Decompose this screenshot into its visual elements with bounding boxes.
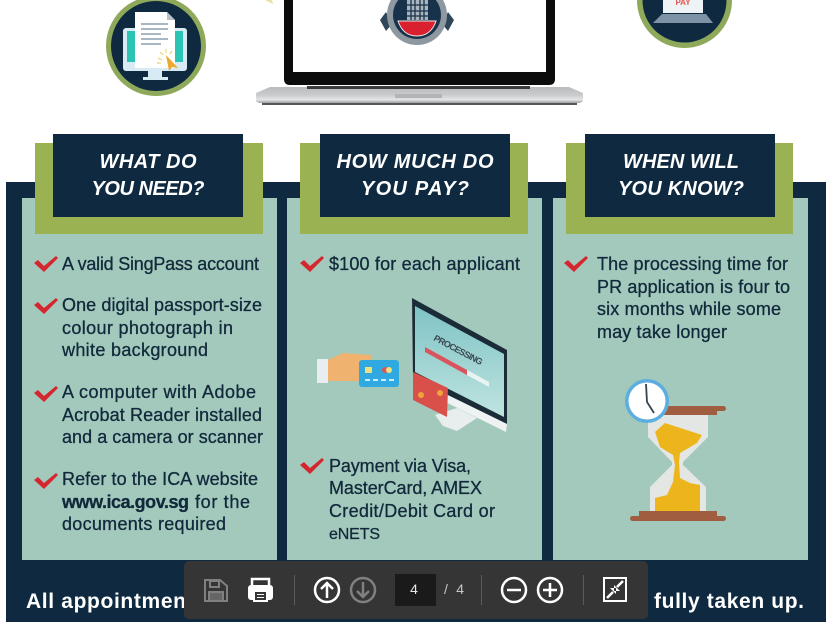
checklist: requirements: www.ica.gov.sg	[61, 492, 189, 512]
icon: zoom out	[502, 578, 526, 602]
illustration: card payment processing: PROCESSING	[432, 333, 484, 367]
illustration: hourglass and clock	[625, 379, 726, 521]
icon: fit to window	[603, 577, 627, 602]
heading: what do you need	[35, 134, 263, 234]
checklist: requirements: white background	[61, 340, 208, 360]
icon: zoom in	[538, 578, 562, 602]
footer text: fully taken up.	[654, 590, 804, 613]
illustration: card payment processing	[317, 298, 507, 432]
checklist: requirements: A computer with Adobe	[62, 382, 256, 402]
text: processing time	[564, 254, 790, 342]
heading: when will you know: WHEN WILL	[623, 151, 739, 173]
heading: how much do you pay	[300, 134, 528, 234]
PDF viewer toolbar	[184, 561, 648, 619]
panel: how much do you pay	[287, 134, 542, 560]
checklist: fee: $100 for each applicant	[329, 254, 520, 274]
checklist: payment methods: MasterCard, AMEX	[329, 478, 482, 498]
crest emblem	[380, 0, 454, 45]
checklist: payment methods	[300, 456, 495, 543]
page number field: 4	[410, 581, 418, 597]
checklist: requirements: A valid SingPass account	[62, 254, 259, 274]
panel: what do you need	[22, 134, 277, 560]
icon: previous page	[315, 578, 339, 602]
checklist: requirements: documents required	[62, 514, 226, 534]
footer text: All appointmen	[26, 590, 186, 613]
text: processing time: may take longer	[597, 322, 727, 342]
checklist: payment methods: Credit/Debit Card or	[329, 501, 495, 521]
heading: what do you need: WHAT DO	[100, 151, 197, 173]
footer text	[26, 590, 804, 613]
checklist: requirements: Acrobat Reader installed	[62, 405, 262, 425]
panel: when will you know	[553, 134, 808, 560]
icon: next page	[351, 578, 375, 602]
icon: laptop payment	[637, 0, 732, 48]
checklist: requirements	[34, 254, 263, 534]
checklist: payment methods: eNETS	[329, 526, 380, 543]
page number field	[395, 574, 464, 606]
laptop with crest	[256, 0, 583, 105]
icon: cursor fragment	[265, 0, 273, 4]
page number field: / 4	[444, 581, 464, 597]
heading: when will you know: YOU KNOW?	[618, 178, 744, 200]
heading: when will you know	[566, 134, 793, 234]
icon: document on monitor	[106, 0, 206, 96]
checklist: payment methods: Payment via Visa,	[329, 456, 471, 476]
text: processing time: The processing time for	[597, 254, 788, 274]
checklist: requirements: One digital passport-size	[62, 295, 262, 315]
heading: how much do you pay: YOU PAY?	[361, 178, 469, 200]
heading: what do you need: YOU NEED?	[92, 178, 204, 200]
navy backing panel	[6, 182, 826, 622]
checklist: requirements: Refer to the ICA website	[62, 469, 258, 489]
icon: print	[248, 579, 273, 602]
text: processing time: six months while some	[597, 299, 781, 319]
icon: save	[205, 580, 227, 601]
heading: how much do you pay: HOW MUCH DO	[336, 151, 494, 173]
text: processing time: PR application is four to	[597, 277, 790, 297]
checklist: requirements: and a camera or scanner	[62, 427, 263, 447]
checklist: requirements: colour photograph in	[62, 318, 233, 338]
checklist: requirements: for the	[195, 492, 250, 512]
